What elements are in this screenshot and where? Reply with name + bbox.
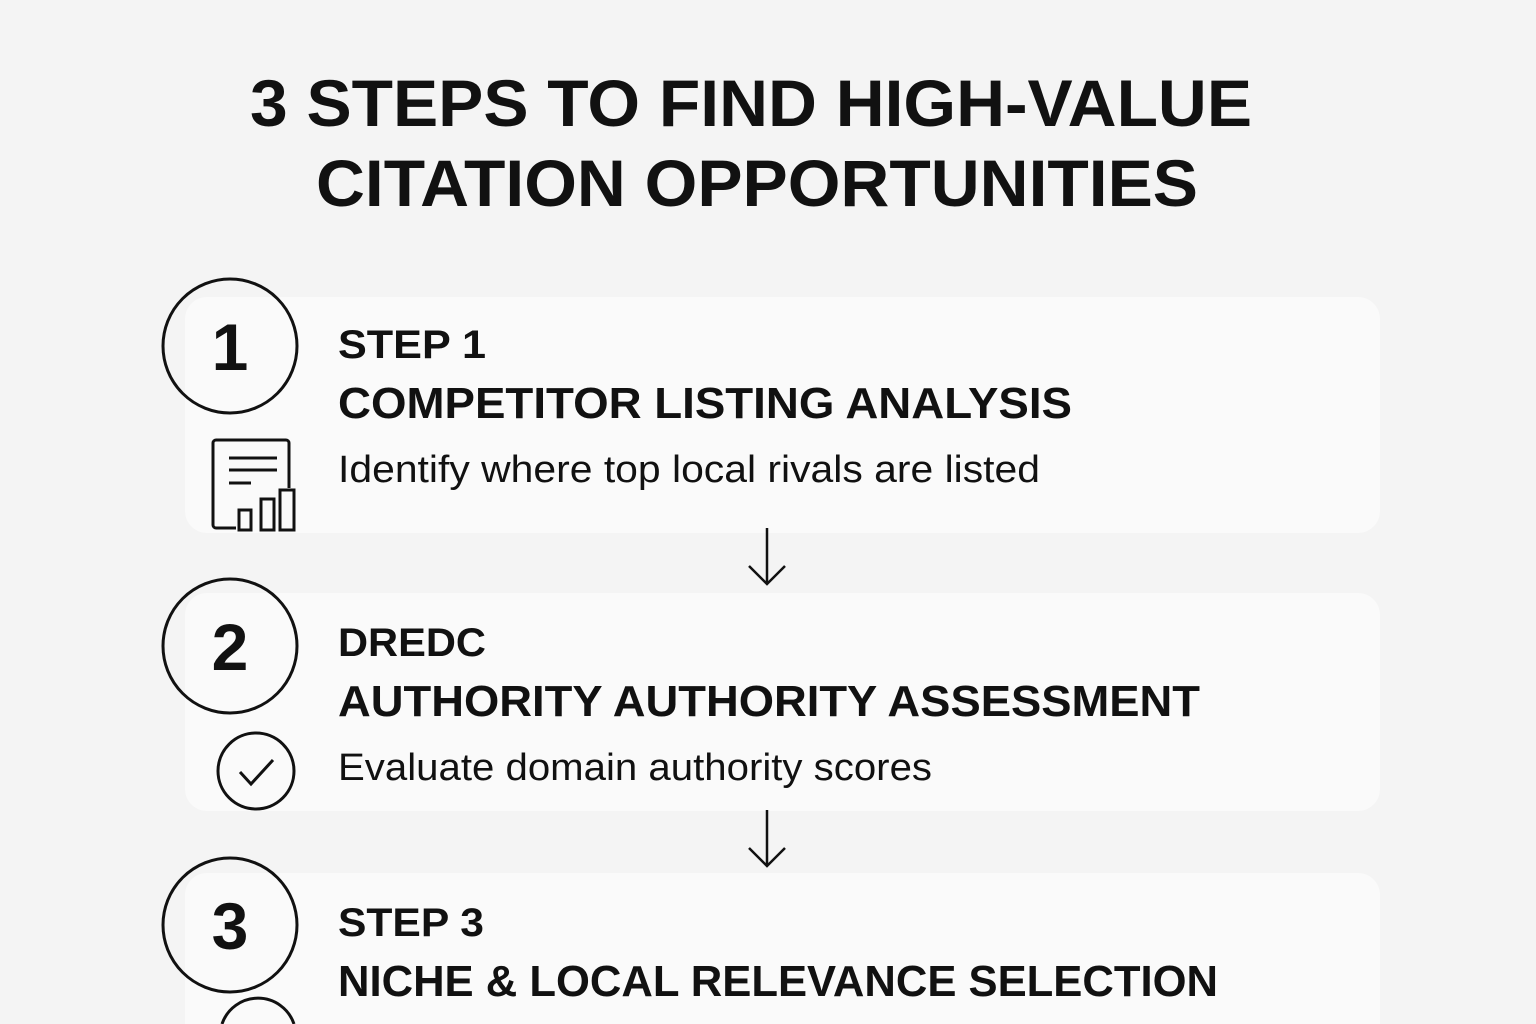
step 3 label: STEP 3 (338, 901, 484, 945)
step 1 label: STEP 1 (338, 323, 486, 367)
step 2 label: DREDC (338, 621, 486, 665)
panel: step 2 (163, 579, 1380, 811)
step 3 heading: NICHE & LOCAL RELEVANCE SELECTION (338, 957, 1218, 1006)
title: CITATION OPPORTUNITIES (316, 146, 1198, 220)
step 1 number circle (163, 279, 297, 413)
panel: step 3 (163, 858, 1380, 1024)
step 3 number circle: 3 (212, 889, 248, 963)
icon: check circle (218, 733, 294, 809)
step 2 heading: AUTHORITY AUTHORITY ASSESSMENT (338, 677, 1200, 726)
title (250, 66, 1252, 220)
step 1 number circle: 1 (212, 310, 248, 384)
title: 3 STEPS TO FIND HIGH-VALUE (250, 66, 1252, 140)
step 1 heading: COMPETITOR LISTING ANALYSIS (338, 379, 1072, 428)
step 2 number circle: 2 (212, 610, 248, 684)
arrow 2 (749, 810, 785, 866)
panel: step 1 (163, 279, 1380, 533)
step 1 description: Identify where top local rivals are listed (338, 449, 1040, 491)
step 3 number circle (163, 858, 297, 992)
step 2 number circle (163, 579, 297, 713)
icon: report chart (213, 440, 294, 530)
icon: partial circle (222, 998, 294, 1024)
step 2 description: Evaluate domain authority scores (338, 747, 932, 789)
arrow 1 (749, 528, 785, 584)
